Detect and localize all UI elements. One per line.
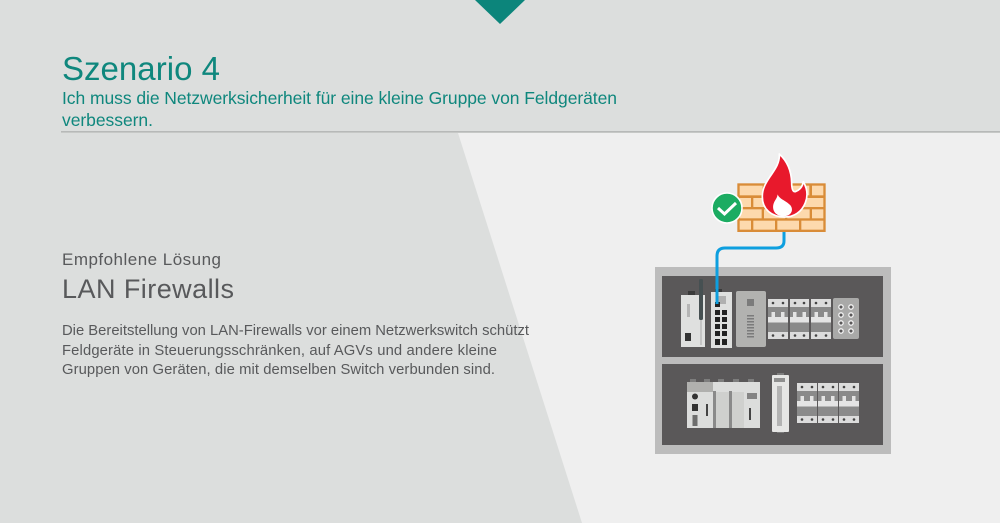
device: cellular firewall xyxy=(681,279,705,347)
subtitle xyxy=(62,88,617,130)
recommended solution label: Empfohlene Lösung xyxy=(62,250,221,269)
blue network cable xyxy=(717,232,784,304)
subtitle: Ich muss die Netzwerksicherheit für eine kleine Gruppe von Feldgeräten xyxy=(62,88,617,108)
subtitle: verbessern. xyxy=(62,110,153,130)
device: PLC controller xyxy=(687,379,760,428)
description text xyxy=(62,323,529,378)
title: Szenario 4 xyxy=(62,50,220,87)
device: circuit breakers top xyxy=(768,299,831,339)
device: IO module xyxy=(772,373,789,433)
icon: green check badge xyxy=(712,193,742,223)
icon: brick wall xyxy=(737,183,826,232)
description text: Feldgeräte in Steuerungsschränken, auf AGVs und andere kleine xyxy=(62,343,497,359)
description text: Gruppen von Geräten, die mit demselben Switch verbunden sind. xyxy=(62,362,495,378)
icon: firewall xyxy=(737,154,826,232)
device: circuit breakers bottom xyxy=(797,383,859,423)
solution heading: LAN Firewalls xyxy=(62,274,234,304)
icon: flame xyxy=(762,154,807,217)
description text: Die Bereitstellung von LAN-Firewalls vor einem Netzwerkswitch schützt xyxy=(62,323,529,339)
illustration: control cabinet xyxy=(655,267,891,454)
device: terminal block xyxy=(833,298,859,339)
top notch triangle xyxy=(475,0,525,24)
device: gateway module xyxy=(736,291,766,347)
device: ethernet switch xyxy=(711,289,732,348)
